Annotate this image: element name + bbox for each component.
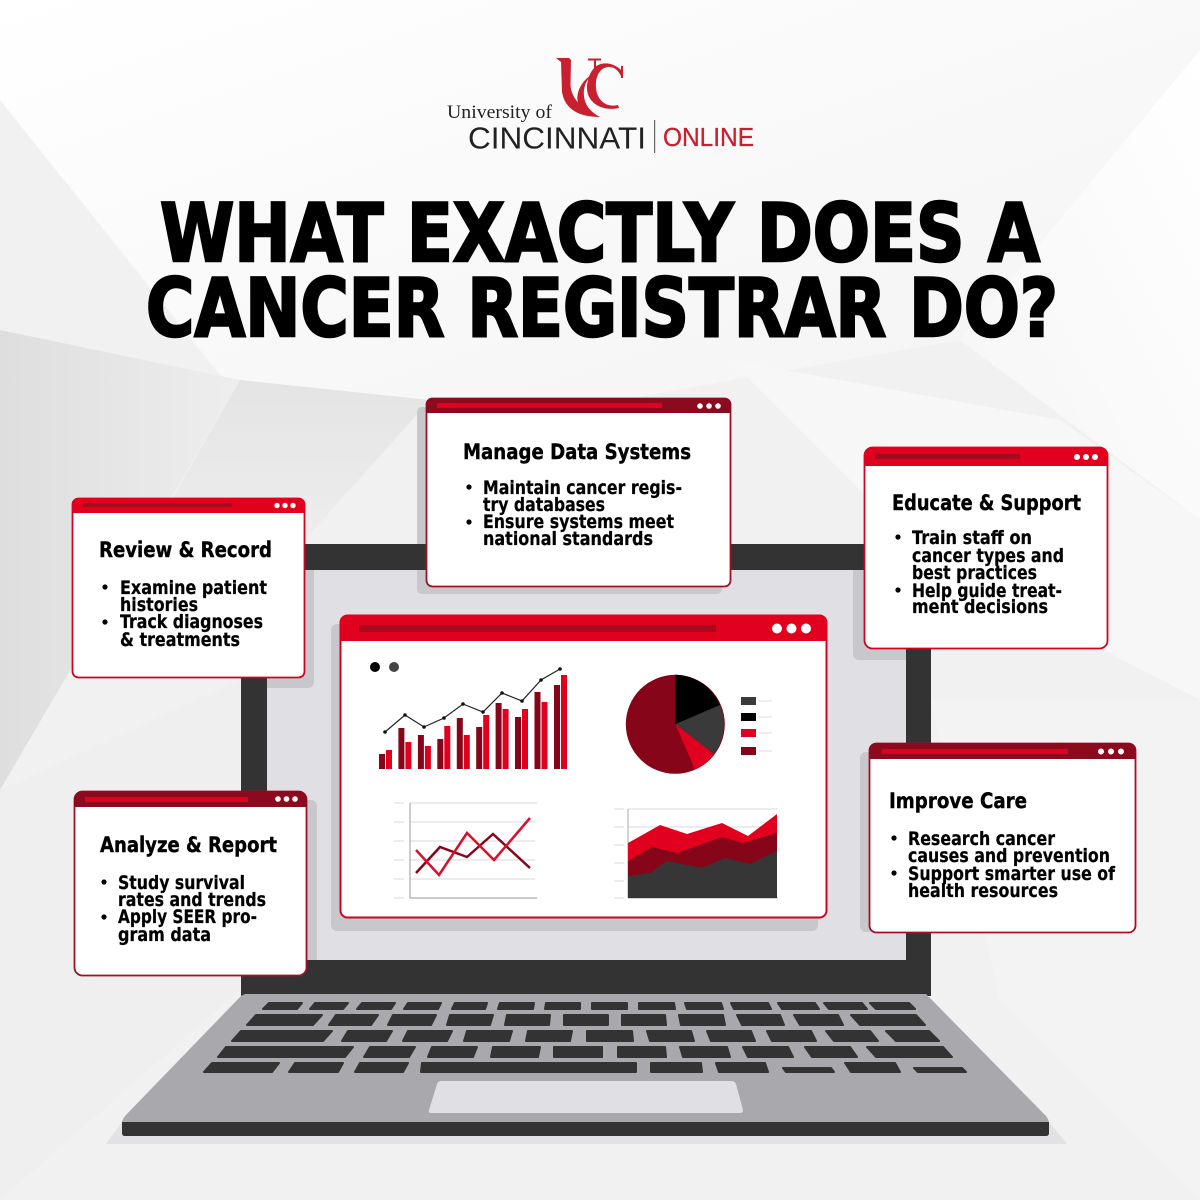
bullets: Examine patient <box>120 577 267 599</box>
logo text: University of: University of <box>447 102 553 123</box>
bullets: & treatments <box>120 629 240 651</box>
card: Improve Care <box>869 743 1136 932</box>
shadow: Manage Data Systems card on background <box>417 407 722 594</box>
title <box>146 187 1058 355</box>
bullets <box>101 872 266 946</box>
bullets: Track diagnoses <box>120 611 263 633</box>
logo text: Online: ONLINE <box>663 122 754 152</box>
logo divider <box>654 120 655 153</box>
keyboard <box>204 1003 966 1072</box>
bullets: best practices <box>912 562 1037 584</box>
pie chart <box>626 675 725 774</box>
bullets: Maintain cancer regis- <box>483 477 682 499</box>
window dots <box>772 624 811 634</box>
laptop front edge <box>122 1122 1049 1136</box>
laptop ground shadow <box>106 1122 1067 1144</box>
logo text: Cincinnati: CINCINNATI <box>468 120 646 156</box>
trackpad <box>429 1081 743 1113</box>
bullets: Research cancer <box>908 828 1056 850</box>
bullets: try databases <box>483 494 605 516</box>
bullets: histories <box>120 594 198 616</box>
bullets: Apply SEER pro- <box>118 906 257 928</box>
laptop base deck <box>122 994 1049 1123</box>
card: Educate & Support <box>864 447 1108 648</box>
card: Review & Record <box>72 498 305 678</box>
bullets: health resources <box>908 880 1058 902</box>
bullets <box>895 527 1064 618</box>
laptop screen <box>267 570 906 960</box>
title: WHAT EXACTLY DOES A <box>160 187 1040 280</box>
bullets: gram data <box>118 924 211 946</box>
bullets: ment decisions <box>912 596 1048 618</box>
card: Analyze & Report <box>74 791 307 976</box>
line chart <box>394 803 537 898</box>
window title bar <box>359 625 716 632</box>
window shadow <box>331 624 818 931</box>
bullets: Train staff on <box>912 527 1032 549</box>
bullets: rates and trends <box>118 889 266 911</box>
bullets: Help guide treat- <box>912 580 1062 602</box>
bullets <box>891 828 1116 902</box>
window body <box>340 616 826 918</box>
heading: Improve Care <box>889 789 1027 813</box>
heading: Analyze & Report <box>100 833 277 857</box>
bullets <box>466 477 682 550</box>
bullets: Study survival <box>118 872 245 894</box>
logo mark: UC monogram <box>556 58 623 117</box>
bullets: cancer types and <box>912 545 1064 567</box>
heading: Review & Record <box>99 538 272 562</box>
pie legend <box>741 697 772 755</box>
bullets: Ensure systems meet <box>483 511 674 533</box>
bar chart with trend line <box>370 662 567 769</box>
heading: Manage Data Systems <box>463 440 691 464</box>
logo <box>447 58 754 156</box>
card: Manage Data Systems <box>426 398 731 586</box>
bullets: causes and prevention <box>908 845 1110 867</box>
bullets <box>102 577 267 651</box>
window header <box>340 615 827 641</box>
main dashboard window <box>331 615 827 931</box>
bullets: Support smarter use of <box>908 863 1116 885</box>
laptop <box>106 544 1067 1144</box>
card shadows on screen <box>267 570 906 960</box>
laptop screen bezel <box>241 544 931 996</box>
area chart <box>614 809 778 898</box>
heading: Educate & Support <box>892 491 1081 515</box>
bullets: national standards <box>483 528 653 550</box>
